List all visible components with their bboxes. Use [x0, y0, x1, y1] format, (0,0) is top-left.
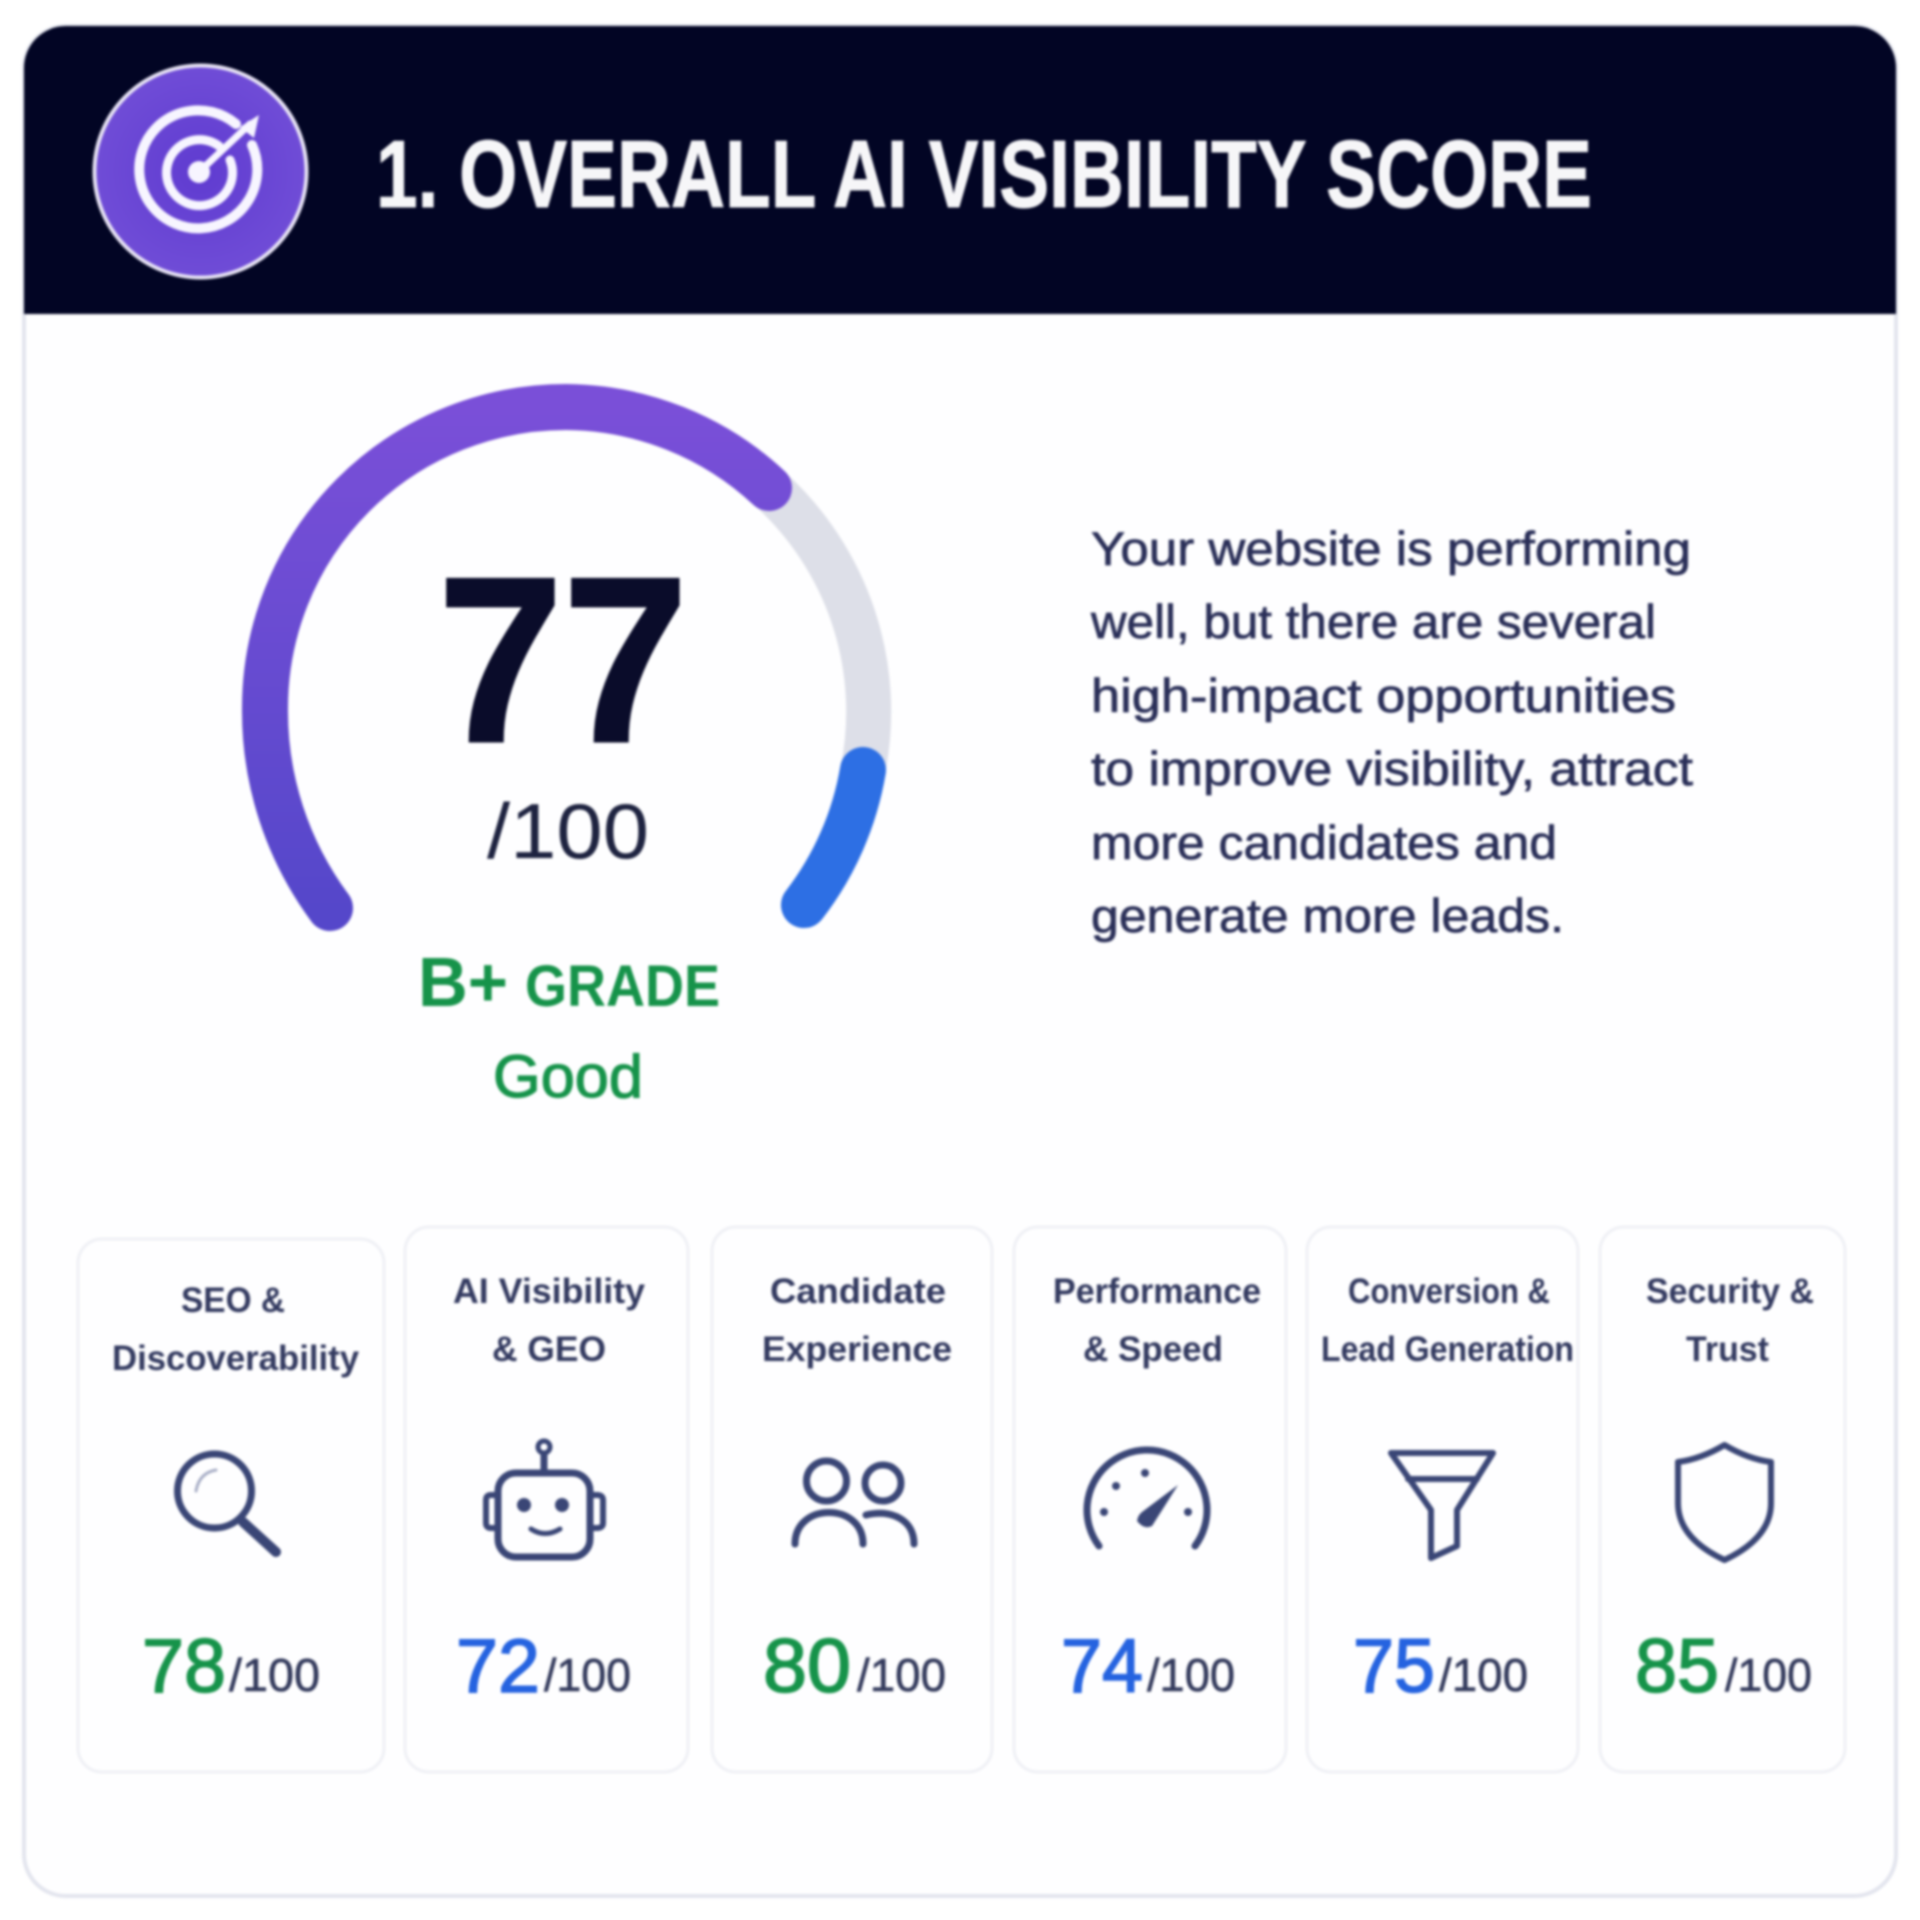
icon: people [795, 1461, 914, 1544]
gauge track [769, 488, 869, 770]
panel: AI Visibility & GEO: & GEO [492, 1330, 606, 1369]
icon: target with arrow [94, 66, 306, 278]
grade [418, 943, 720, 1110]
score 74: /100 [1147, 1649, 1235, 1701]
panel: Candidate Experience: Experience [762, 1330, 952, 1369]
icon: speedometer [1087, 1450, 1207, 1546]
gauge purple arc [265, 407, 769, 908]
icon: funnel [1391, 1453, 1493, 1558]
score 75: /100 [1439, 1649, 1528, 1701]
panel: SEO & Discoverability [78, 1239, 384, 1772]
panel: Security & Trust: Security & [1646, 1272, 1814, 1311]
title: 1. OVERALL AI VISIBILITY SCORE [376, 121, 1592, 228]
header bar [24, 26, 1896, 314]
score 72: 72 [456, 1624, 540, 1709]
summary text: generate more leads. [1091, 889, 1564, 942]
summary text: more candidates and [1091, 816, 1557, 869]
score 80: 80 [763, 1624, 851, 1709]
score 72 [456, 1624, 631, 1709]
score 74: 74 [1061, 1624, 1143, 1709]
grade: Good [493, 1043, 643, 1110]
panel: Performance & Speed [1014, 1227, 1286, 1772]
panel: AI Visibility & GEO [405, 1227, 688, 1772]
gauge value: 77 [438, 528, 688, 791]
panel: Performance & Speed: Performance [1053, 1272, 1261, 1311]
gauge chart [265, 407, 869, 908]
score 78 [142, 1624, 320, 1709]
summary text [1090, 522, 1693, 942]
score 85: 85 [1635, 1624, 1719, 1709]
gauge blue arc [804, 770, 863, 905]
panel: SEO & Discoverability: SEO & [181, 1281, 285, 1320]
score 85: /100 [1725, 1649, 1812, 1701]
score 85 [1635, 1624, 1812, 1709]
score 78: 78 [142, 1624, 226, 1709]
panel: Candidate Experience: Candidate [770, 1272, 946, 1311]
summary text: to improve visibility, attract [1091, 742, 1693, 795]
panel: Conversion & Lead Generation: Lead Generation [1321, 1330, 1574, 1369]
panel: Security & Trust [1600, 1227, 1845, 1772]
score 78: /100 [229, 1649, 320, 1701]
panel: Security & Trust: Trust [1686, 1330, 1769, 1369]
panel: Performance & Speed: & Speed [1083, 1330, 1223, 1369]
icon: robot [486, 1441, 603, 1557]
panel: AI Visibility & GEO: AI Visibility [453, 1272, 646, 1311]
panel: Candidate Experience [712, 1227, 992, 1772]
score 80: /100 [857, 1649, 946, 1701]
gauge denominator: /100 [487, 787, 649, 875]
summary text: Your website is performing [1091, 522, 1691, 575]
score 75 [1353, 1624, 1528, 1709]
panel: Conversion & Lead Generation: Conversion & [1348, 1272, 1550, 1311]
score 75: 75 [1353, 1624, 1435, 1709]
icon: magnifier [178, 1454, 276, 1552]
panel: Conversion & Lead Generation [1307, 1227, 1578, 1772]
score 72: /100 [544, 1649, 631, 1701]
summary text: high-impact opportunities [1091, 669, 1676, 722]
panel: SEO & Discoverability: Discoverability [112, 1339, 360, 1378]
grade: GRADE [525, 954, 720, 1019]
grade: B+ [418, 943, 508, 1021]
icon: shield [1678, 1445, 1771, 1560]
summary text: well, but there are several [1090, 595, 1656, 648]
score 80 [763, 1624, 946, 1709]
score 74 [1061, 1624, 1235, 1709]
